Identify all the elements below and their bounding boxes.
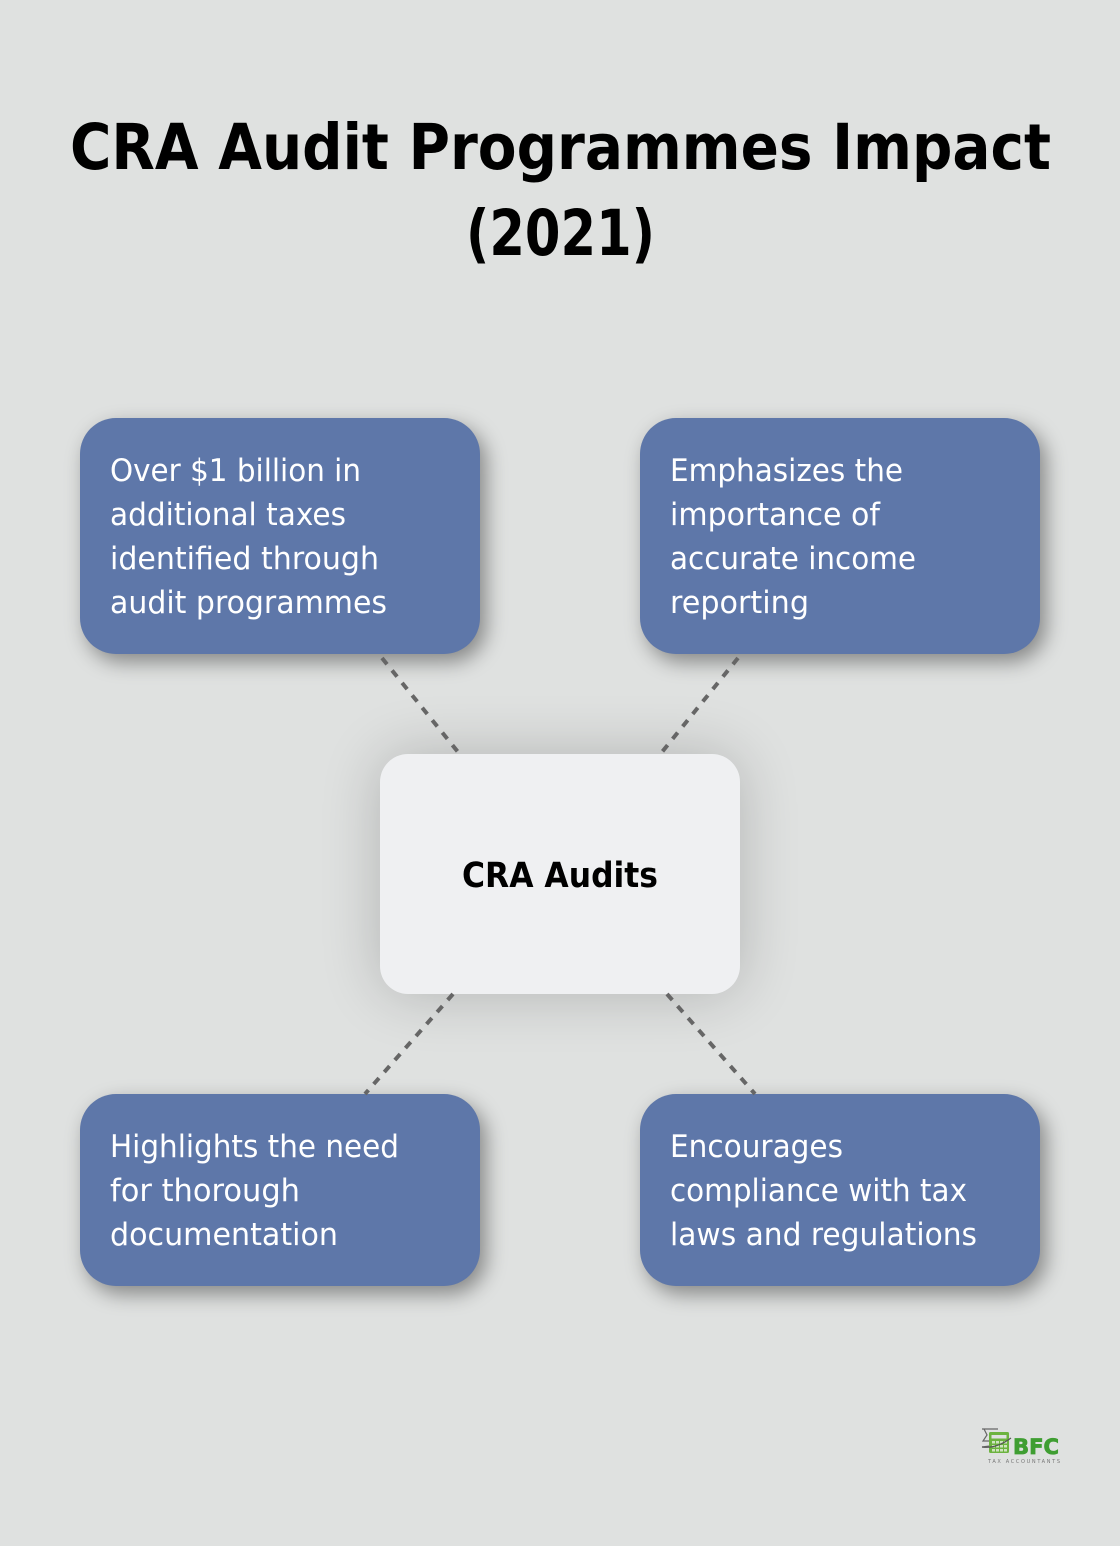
text: additional taxes: Over $1 billion in [110,453,361,489]
panel: accurate income reporting [640,418,1040,654]
text: thorough documentation: Highlights the need [110,1129,399,1165]
text: additional taxes: audit programmes [110,585,387,621]
logo: BFC Tax Accountants: BFC [1013,1435,1059,1459]
central node label: CRA Audits [462,856,658,896]
title [70,111,1051,270]
text: additional taxes: additional taxes [110,497,346,533]
text: thorough documentation [110,1129,399,1253]
text: compliance: laws and regulations [670,1217,977,1253]
text: additional taxes [110,453,387,621]
text: compliance [670,1129,977,1253]
text: accurate income reporting: Emphasizes the [670,453,903,489]
panel: additional taxes [80,418,480,654]
logo: BFC Tax Accountants [982,1428,1060,1465]
text: accurate income reporting: importance of [670,497,881,533]
text: accurate income reporting: reporting [670,585,809,621]
text: accurate income reporting: accurate income [670,541,916,577]
text: compliance: compliance with tax [670,1173,967,1209]
panel: thorough documentation [80,1094,480,1286]
panel: central node [380,754,740,994]
panel: compliance [640,1094,1040,1286]
text: thorough documentation: documentation [110,1217,338,1253]
text: accurate income reporting [670,453,916,621]
text: additional taxes: identified through [110,541,379,577]
text: compliance: Encourages [670,1129,843,1165]
logo: BFC Tax Accountants: TAX ACCOUNTANTS [987,1459,1060,1465]
title: (2021) [466,197,655,270]
text: thorough documentation: for thorough [110,1173,300,1209]
